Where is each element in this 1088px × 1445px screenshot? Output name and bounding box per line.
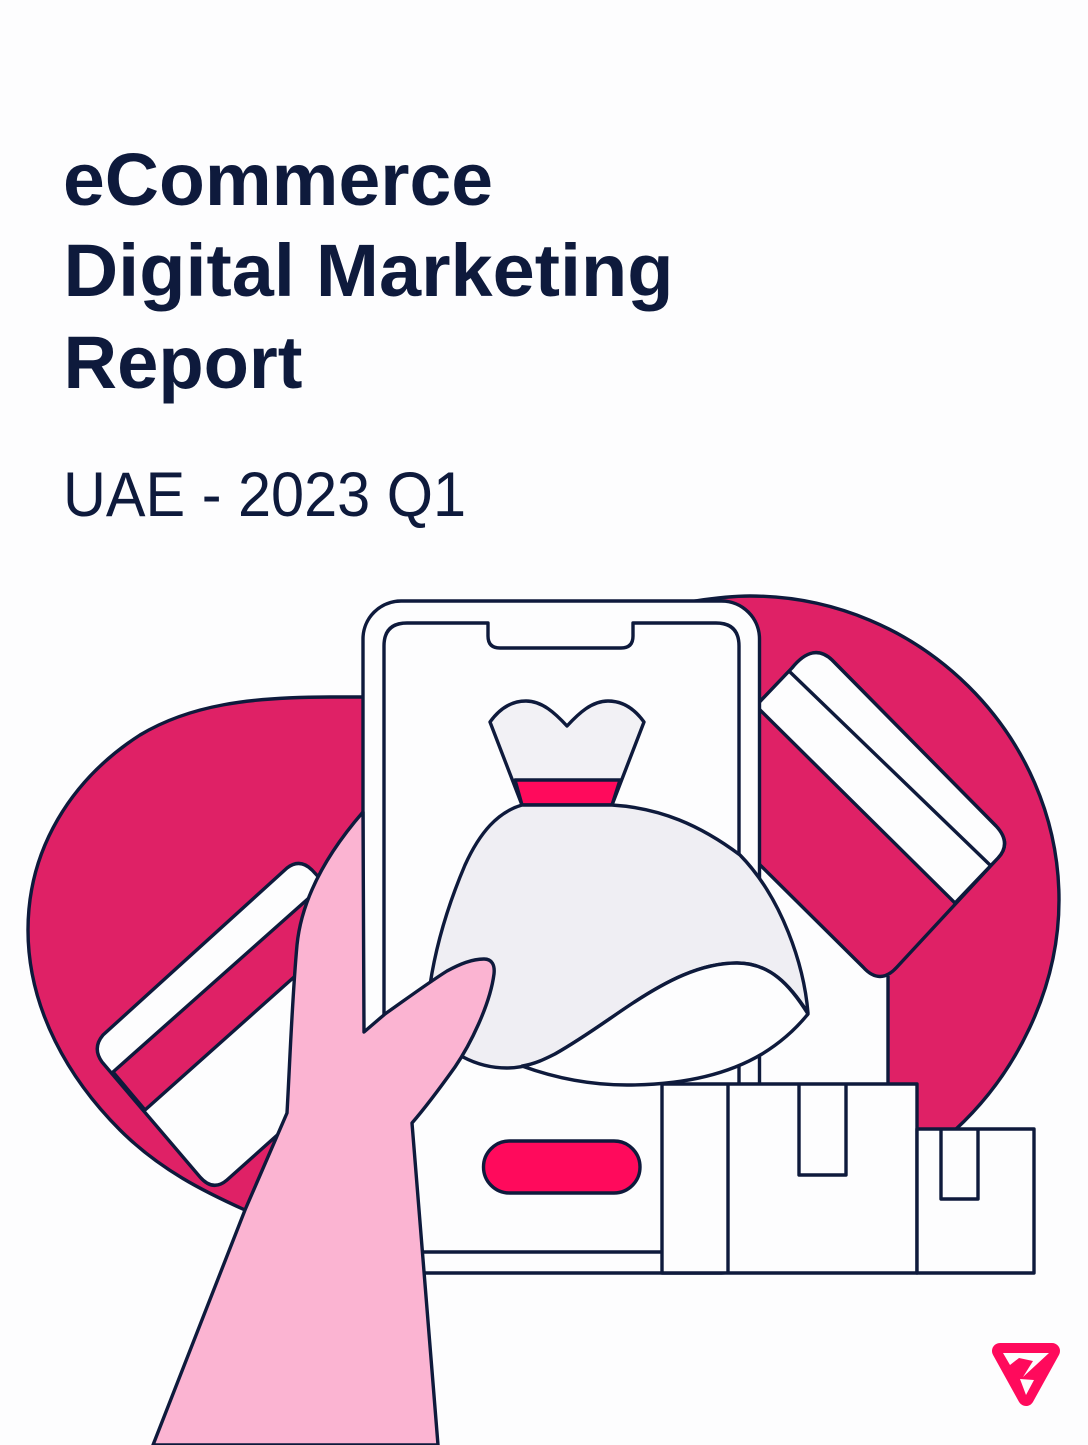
right credit card	[750, 653, 1005, 976]
subtitle: UAE - 2023 Q1	[63, 460, 466, 530]
title	[63, 138, 674, 404]
title: Digital Marketing	[64, 229, 674, 312]
phone	[363, 601, 760, 1273]
title: eCommerce	[63, 138, 493, 221]
title: Report	[64, 321, 302, 404]
left credit card	[97, 863, 340, 1185]
white backing panel	[760, 860, 888, 1090]
buy button	[484, 1141, 640, 1193]
dress skirt	[430, 805, 808, 1068]
dress bodice	[490, 701, 644, 805]
hand	[153, 812, 494, 1445]
phone screen and notch	[384, 623, 739, 1252]
illustration	[28, 596, 1059, 1445]
dress belt	[515, 780, 620, 805]
dress lower fold	[522, 963, 808, 1085]
logo	[1000, 1351, 1052, 1398]
background blob	[28, 596, 1059, 1210]
dress	[430, 701, 808, 1085]
small box	[917, 1129, 1034, 1273]
large box	[662, 1084, 917, 1273]
